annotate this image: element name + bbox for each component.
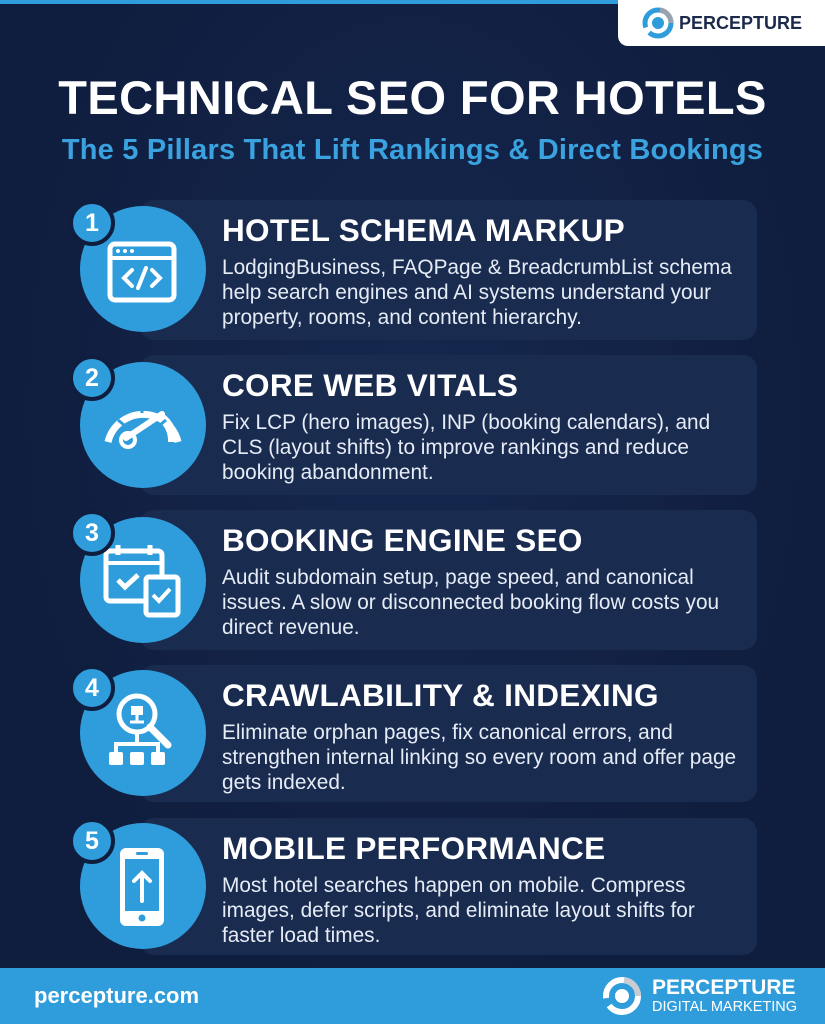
icon: magnifier sitemap bbox=[80, 670, 206, 796]
heading 3: BOOKING ENGINE SEO bbox=[222, 522, 583, 558]
footer logo bbox=[603, 976, 797, 1015]
footer bbox=[0, 968, 825, 1024]
text 2: Fix LCP (hero images), INP (booking calendars), and CLS (layout shifts) to improve rankings and reduce booking abandonment. bbox=[222, 411, 710, 484]
badge 4 bbox=[69, 665, 115, 711]
badge 5 bbox=[69, 818, 115, 864]
title: TECHNICAL SEO FOR HOTELS bbox=[58, 71, 767, 124]
heading 4: CRAWLABILITY & INDEXING bbox=[222, 677, 659, 713]
badge 3: 3 bbox=[85, 519, 99, 547]
text 1: LodgingBusiness, FAQPage & BreadcrumbList schema help search engines and AI systems understand your property, rooms, and content hierarchy. bbox=[222, 256, 732, 329]
pillar 4 bbox=[73, 665, 757, 802]
icon: code window bbox=[80, 206, 206, 332]
footer url: percepture.com bbox=[34, 983, 199, 1008]
top logo box: PERCEPTURE bbox=[679, 13, 802, 33]
pillar 1 bbox=[73, 200, 757, 340]
badge 3 bbox=[69, 510, 115, 556]
text 5: Most hotel searches happen on mobile. Compress images, defer scripts, and eliminate layout shifts for faster load times. bbox=[222, 874, 695, 947]
text 3: Audit subdomain setup, page speed, and canonical issues. A slow or disconnected booking flow costs you direct revenue. bbox=[222, 566, 719, 639]
pillar 3 bbox=[73, 510, 757, 650]
footer logo: PERCEPTURE bbox=[652, 976, 796, 999]
pillar 5 bbox=[73, 818, 757, 955]
subtitle: The 5 Pillars That Lift Rankings & Direct Bookings bbox=[62, 134, 763, 166]
top accent stripe bbox=[0, 0, 618, 4]
heading 2: CORE WEB VITALS bbox=[222, 367, 518, 403]
badge 1: 1 bbox=[85, 209, 99, 237]
icon: calendar and book bbox=[80, 517, 206, 643]
icon: speedometer bbox=[80, 362, 206, 488]
top logo box bbox=[618, 0, 825, 46]
text 4: Eliminate orphan pages, fix canonical errors, and strengthen internal linking so every room and offer page gets indexed. bbox=[222, 721, 736, 794]
badge 2: 2 bbox=[85, 364, 99, 392]
badge 2 bbox=[69, 355, 115, 401]
heading 1: HOTEL SCHEMA MARKUP bbox=[222, 212, 625, 248]
badge 5: 5 bbox=[85, 827, 99, 855]
icon: mobile phone bbox=[80, 823, 206, 949]
pillar 2 bbox=[73, 355, 757, 495]
badge 1 bbox=[69, 200, 115, 246]
footer logo: DIGITAL MARKETING bbox=[652, 999, 797, 1015]
heading 5: MOBILE PERFORMANCE bbox=[222, 830, 605, 866]
badge 4: 4 bbox=[85, 674, 99, 702]
